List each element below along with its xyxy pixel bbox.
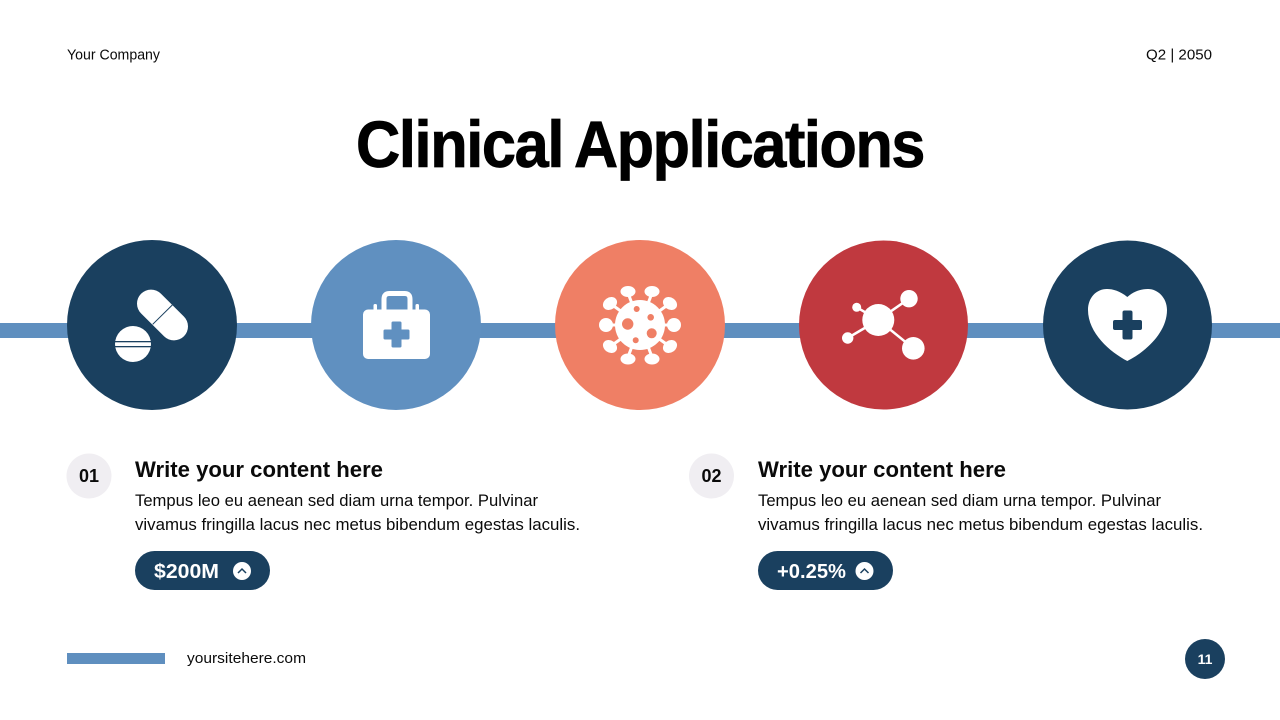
header: company name: Your Company <box>67 48 161 64</box>
body text 01 <box>135 492 580 534</box>
stat pill +0.25%: +0.25% <box>777 561 846 583</box>
body text 01: Tempus leo eu aenean sed diam urna tempor. Pulvinar <box>135 492 538 510</box>
page number: 11 <box>1198 651 1213 667</box>
body text 02: vivamus fringilla lacus nec metus bibendum egestas laculis. <box>758 516 1203 534</box>
title <box>356 107 924 181</box>
stat pill $200M: $200M <box>154 561 219 583</box>
body text 01: vivamus fringilla lacus nec metus bibendum egestas laculis. <box>135 516 580 534</box>
timeline bar <box>0 323 1280 338</box>
panel: item 01 <box>66 454 580 590</box>
icon: virus <box>555 240 725 410</box>
number badge 01 <box>66 454 112 498</box>
heading 01: Write your content here <box>135 457 383 482</box>
icon: first aid kit <box>311 240 481 410</box>
icon: heart with cross <box>1043 240 1212 410</box>
body text 02: Tempus leo eu aenean sed diam urna tempor. Pulvinar <box>758 492 1161 510</box>
icon: molecule network <box>799 240 968 410</box>
number badge 01: 01 <box>79 466 99 486</box>
panel: item 02 <box>689 454 1203 590</box>
title: Clinical <box>356 107 563 181</box>
body text 02 <box>758 492 1203 534</box>
icon: pills <box>67 240 237 410</box>
header: period: Q2 | 2050 <box>1146 48 1212 64</box>
title: Applications <box>574 107 924 181</box>
stat pill $200M <box>135 551 270 590</box>
heading 02: Write your content here <box>758 457 1006 482</box>
page number <box>1185 639 1225 679</box>
footer website: yoursitehere.com <box>187 650 306 667</box>
number badge 02 <box>689 454 734 498</box>
number badge 02: 02 <box>701 466 722 486</box>
footer accent bar <box>67 653 165 664</box>
stat pill +0.25% <box>758 551 893 590</box>
